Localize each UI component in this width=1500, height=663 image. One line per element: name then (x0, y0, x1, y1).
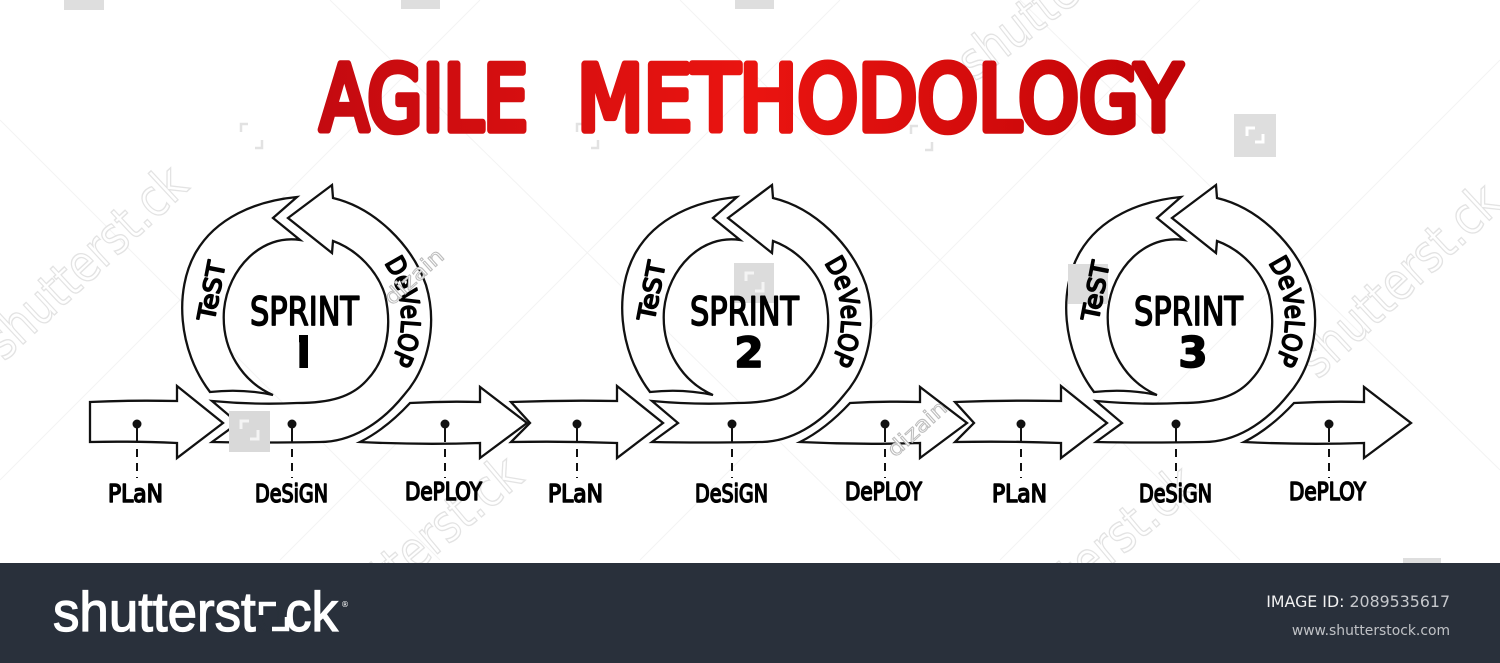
plan arrow 3 (955, 386, 1107, 458)
heading: sprint 3: SPRINT (1134, 290, 1243, 335)
watermark layer: shutterst.ck (975, 454, 1209, 663)
marker: plan 2 (572, 420, 582, 478)
number 2: 2 (734, 328, 764, 377)
label: develop 1: DeVeLOP (384, 254, 422, 368)
number 3: 3 (1178, 328, 1208, 377)
deploy arrow 3 (1244, 387, 1411, 458)
watermark: author tag 1: dizain (379, 244, 449, 310)
label: deploy 2: DePLOY (845, 477, 923, 506)
sprint 2 group (511, 185, 967, 508)
marker: plan 1 (132, 420, 142, 478)
image id: IMAGE ID: 2089535617 (1266, 592, 1450, 611)
title: METHODOLOGY (577, 47, 1183, 152)
marker: design 3 (1172, 420, 1180, 478)
develop and design arrow 2 (652, 185, 871, 442)
title (320, 47, 1183, 152)
label: test 1: TeST (192, 259, 231, 324)
label: test 3: TeST (1076, 259, 1115, 324)
number 1: 1 (284, 325, 322, 390)
plan arrow 1 (90, 386, 223, 458)
label: develop 2: DeVeLOP (824, 254, 862, 368)
watermark layer: shutterst.ck (300, 444, 534, 654)
heading: sprint 1: SPRINT (250, 290, 359, 335)
marker: deploy 1 (440, 420, 450, 478)
footer logo: ® (341, 600, 349, 609)
marker: design 2 (728, 420, 736, 478)
label: plan 2: PLaN (548, 479, 603, 508)
plan arrow 2 (511, 386, 663, 458)
sprint 1 group (88, 182, 528, 508)
test arrow 1 (182, 197, 300, 395)
website: www.shutterstock.com (1292, 623, 1450, 639)
watermark: author tag 2: dizain (882, 396, 952, 462)
marker: plan 3 (1016, 420, 1026, 478)
label: design 3: DeSiGN (1139, 479, 1212, 508)
label: plan 3: PLaN (992, 479, 1047, 508)
title: AGILE (320, 47, 528, 152)
develop and design arrow 3 (1096, 185, 1315, 442)
marker: deploy 2 (880, 420, 890, 478)
footer logo: shutterstock (53, 580, 339, 643)
test arrow 3 (1066, 197, 1184, 395)
label: design 1: DeSiGN (255, 479, 328, 508)
develop and design arrow 1 (212, 185, 431, 442)
label: test 2: TeST (632, 259, 671, 324)
deploy arrow 1 (360, 387, 527, 458)
heading: sprint 2: SPRINT (690, 290, 799, 335)
label: design 2: DeSiGN (695, 479, 768, 508)
deploy arrow 2 (800, 387, 967, 458)
marker: deploy 3 (1324, 420, 1334, 478)
label: deploy 3: DePLOY (1289, 477, 1367, 506)
label: develop 3: DeVeLOP (1268, 254, 1306, 368)
watermark tile on sprint 3 (1068, 264, 1108, 304)
watermark tile on sprint 2 (734, 263, 774, 303)
sprint 3 group (955, 185, 1411, 508)
footer bar (0, 563, 1500, 663)
label: deploy 1: DePLOY (405, 477, 483, 506)
test arrow 2 (622, 197, 740, 395)
watermark tile on design arrow (229, 411, 270, 452)
marker: design 1 (288, 420, 296, 478)
label: plan 1: PLaN (108, 479, 163, 508)
